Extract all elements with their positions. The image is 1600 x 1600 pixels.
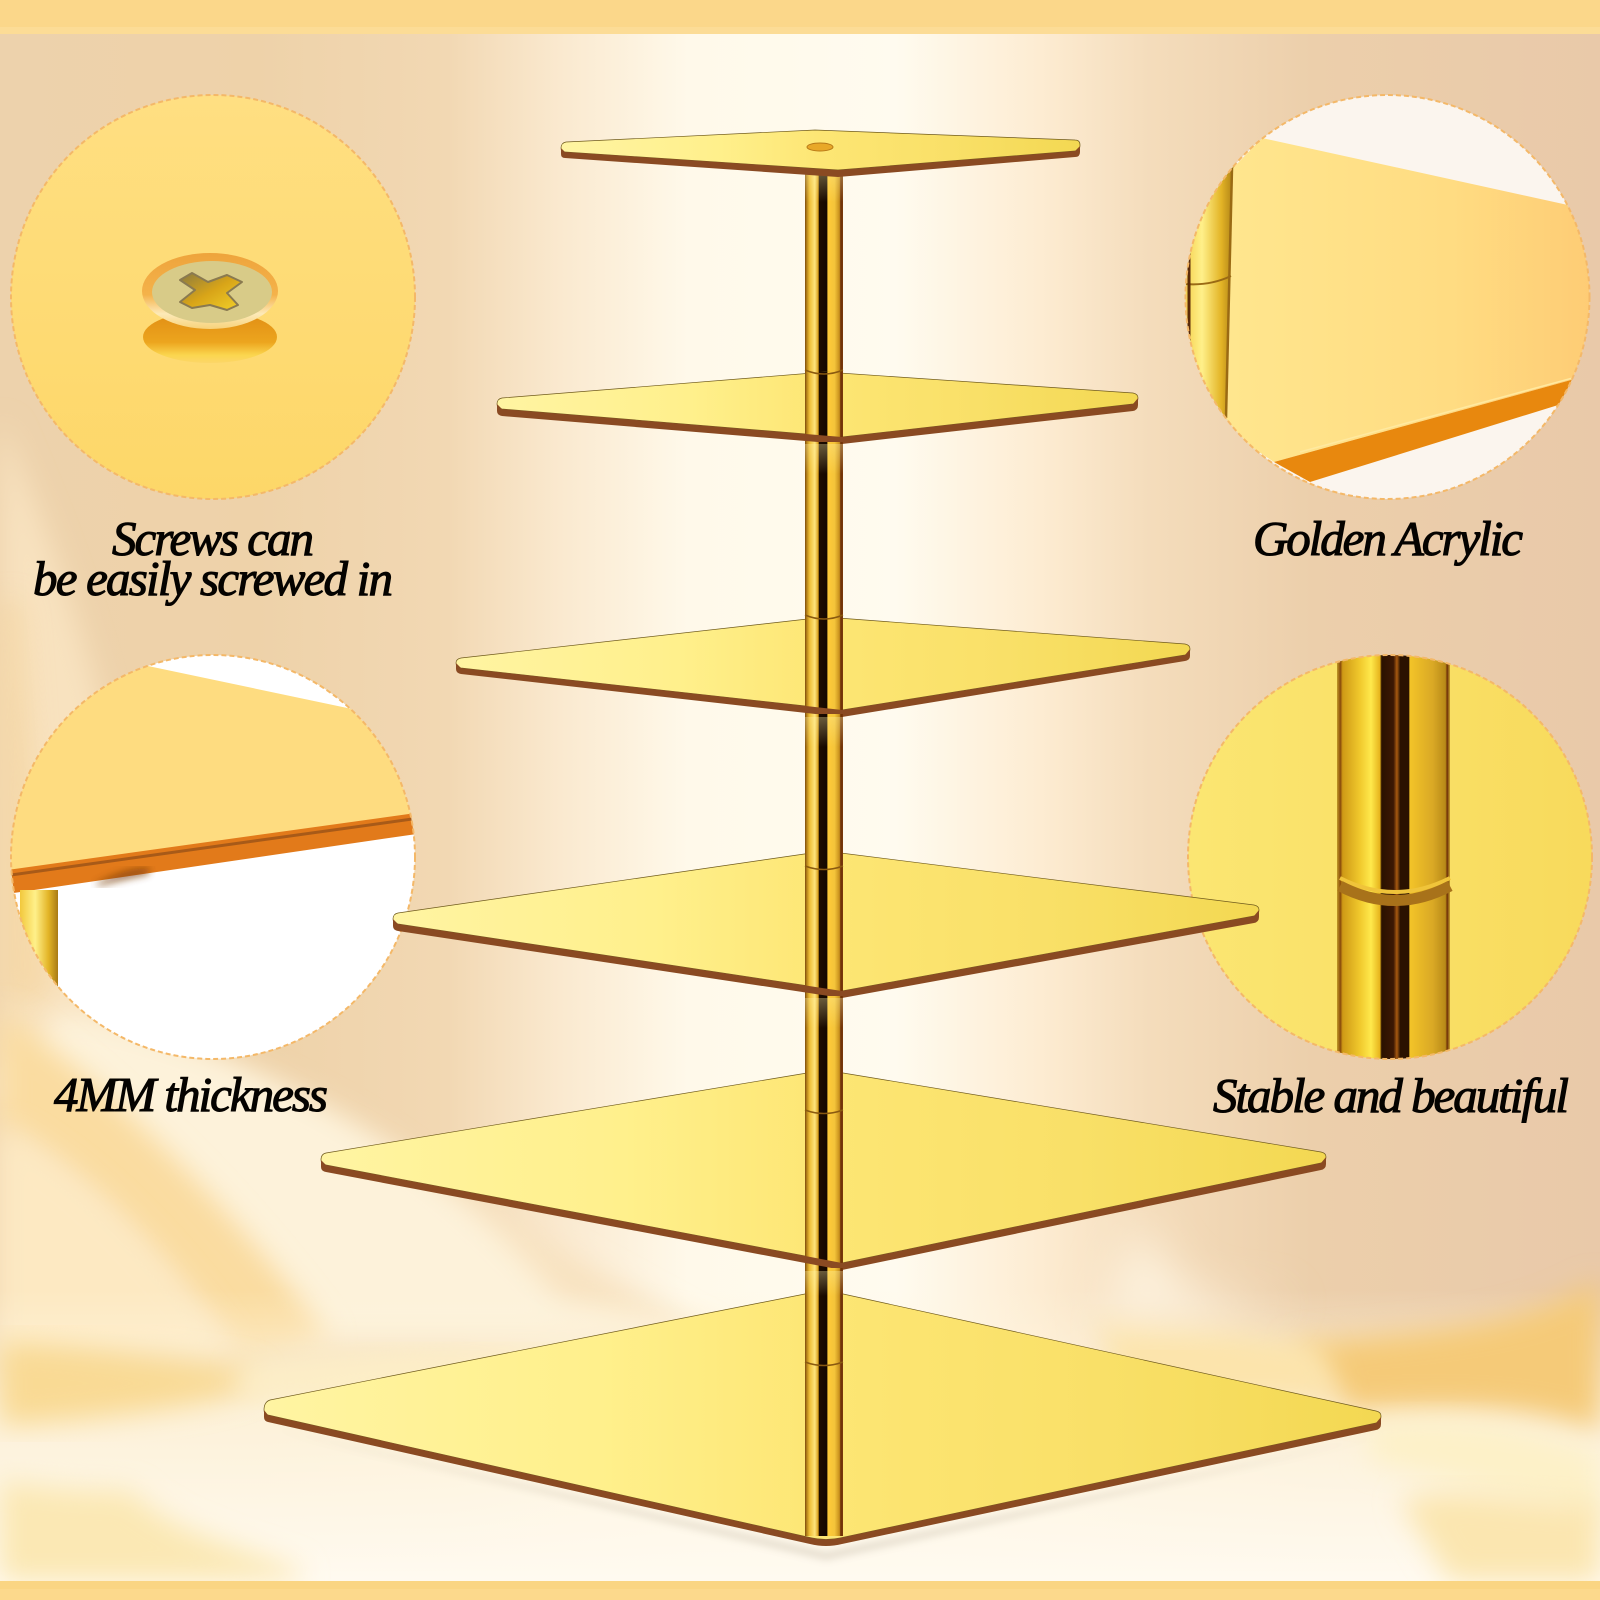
dashed outline — [1188, 655, 1592, 1059]
panel: stable column detail — [1188, 650, 1592, 1070]
tier 1 screw hole — [807, 143, 833, 151]
tier 4 top face — [393, 851, 1259, 991]
screw cross slot — [180, 273, 242, 310]
circle: acrylic photo — [1180, 95, 1600, 499]
tier 3 brown edge — [456, 649, 1190, 717]
tier 2 top face — [497, 372, 1138, 437]
tier 3 top face — [456, 617, 1190, 710]
tier 1 top face — [561, 130, 1080, 170]
screw rim — [142, 253, 278, 329]
tier 5 top face — [321, 1070, 1326, 1263]
tier 5 column segment — [805, 996, 843, 1268]
caption: screws: be easily screwed in — [33, 551, 393, 606]
screw reflection — [143, 311, 277, 363]
circle: screw background — [11, 95, 415, 499]
tier 6 shadow — [270, 1428, 1380, 1560]
tier 2 shelf — [497, 370, 1138, 444]
tier 2 brown edge — [497, 398, 1138, 444]
tier 6 brown edge — [264, 1410, 1381, 1546]
tier 6 base shelf — [264, 1268, 1381, 1560]
caption: screws — [33, 511, 393, 606]
tier 1 column segment — [805, 172, 843, 372]
caption: golden acrylic: Golden Acrylic — [1253, 511, 1523, 566]
screw head — [152, 261, 272, 323]
caption: thickness: 4MM thickness — [54, 1067, 328, 1122]
tier 1 brown edge — [561, 146, 1080, 177]
tier 2 column segment — [805, 370, 843, 442]
tier 6 column segment — [805, 1268, 843, 1536]
circle: thickness photo — [0, 655, 430, 1059]
bottom band — [0, 1581, 1600, 1600]
tier 4 brown edge — [393, 910, 1259, 998]
tier 5 shelf — [321, 996, 1326, 1270]
tier 5 brown edge — [321, 1157, 1326, 1270]
tier 4 shelf — [393, 714, 1259, 998]
tier 4 column segment — [805, 714, 843, 996]
panel: 4mm thickness detail — [0, 655, 430, 1059]
tier 3 column segment — [805, 442, 843, 714]
top band — [0, 0, 1600, 34]
dashed outline — [1186, 95, 1590, 499]
panel: golden acrylic detail — [1180, 95, 1600, 499]
icon: screw — [142, 253, 278, 363]
tier 3 shelf — [456, 442, 1190, 717]
tier 1 shelf — [561, 130, 1080, 372]
dashed outline — [11, 95, 415, 499]
dashed outline — [11, 655, 415, 1059]
circle: column photo — [1188, 650, 1592, 1070]
caption: stable: Stable and beautiful — [1213, 1068, 1569, 1123]
panel: screw detail — [11, 95, 415, 499]
tier 6 top face — [264, 1290, 1381, 1540]
caption: screws: Screws can — [112, 511, 314, 566]
